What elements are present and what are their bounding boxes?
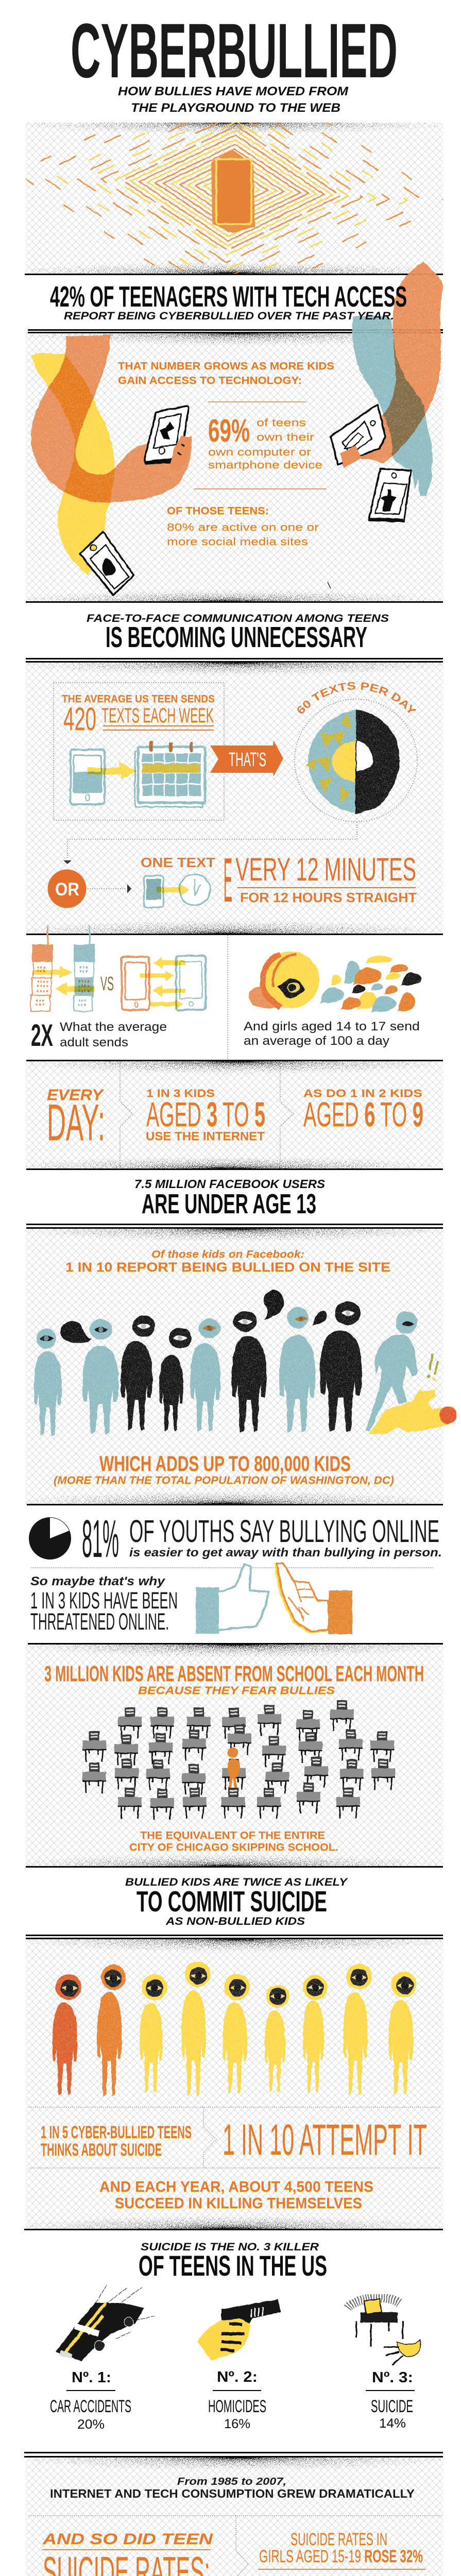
- teen 9: [388, 1972, 417, 2095]
- heading: twice as likely: [125, 1876, 348, 1927]
- person 3: [121, 1315, 155, 1431]
- text: 800,000 kids: WHICH ADDS UP TO 800,000 KIDS: [99, 1451, 351, 1476]
- text: no. 1: Nº. 1:: [72, 2369, 111, 2386]
- rule: [26, 934, 443, 935]
- text: girls rates rose: GIRLS AGED 15-19 ROSE 32%: [259, 2547, 423, 2566]
- text: entire city of chicago: CITY OF CHICAGO SKIPPING SCHOOL.: [129, 1842, 338, 1853]
- text: girls aged 14 to 17: an average of 100 a day: [244, 1034, 389, 1048]
- teen 7: [303, 1975, 328, 2093]
- icon: old cell phones and smartphones: [31, 925, 206, 1011]
- text: 800,000 kids: (MORE THAN THE TOTAL POPULATION OF WASHINGTON, DC): [54, 1475, 394, 1486]
- label: VS: VS: [100, 973, 114, 995]
- subtitle: [118, 84, 349, 115]
- heading: twice as likely: AS NON-BULLIED KIDS: [165, 1916, 305, 1927]
- text: 420 texts each week: 420: [63, 701, 96, 737]
- icon: speeding car: [56, 2284, 155, 2361]
- icon: dotted circle with sun and moon: 60 TEXTS PER DAY: [297, 682, 416, 714]
- section: 81 percent: [29, 1509, 442, 1635]
- text: internet consumption: INTERNET AND TECH CONSUMPTION GREW DRAMATICALLY: [50, 2487, 415, 2500]
- double rule: [24, 2452, 443, 2458]
- text: 3 million kids: BECAUSE THEY FEAR BULLIES: [138, 1685, 335, 1697]
- text: ages 6 to 9: [303, 1089, 423, 1127]
- text: 81 percent of youths: 81%: [82, 1509, 119, 1568]
- text: 2x what the average adult sends: [31, 1018, 167, 1053]
- heading: 42 percent: REPORT BEING CYBERBULLIED OVER THE PAST YEAR.: [64, 310, 394, 322]
- panel: technology access: [26, 333, 443, 601]
- rule: [27, 1504, 443, 1505]
- text: technology access stats: own their: [257, 432, 314, 443]
- double rule: [26, 1935, 443, 1939]
- teen 3: [140, 1974, 167, 2093]
- icon: girl with speech drops: [249, 952, 421, 1012]
- text: technology access stats: smartphone device: [208, 460, 322, 471]
- text: 1 in 3 kids threatened: [30, 1574, 178, 1635]
- icon: middle finger hand: [275, 1563, 352, 1634]
- icon: teal phone sending to calendar: [71, 741, 205, 807]
- left arms: [31, 335, 192, 575]
- teen 6: [265, 1985, 289, 2093]
- icon: thumbs up: [196, 1564, 269, 1634]
- icon: gun in hand: [197, 2299, 281, 2361]
- badge: OR: [47, 860, 131, 908]
- text: entire city of chicago: THE EQUIVALENT OF THE ENTIRE: [140, 1830, 325, 1841]
- table lines and chevron: [29, 2107, 440, 2168]
- text: 1 in 3 kids threatened: 1 IN 3 KIDS HAVE BEEN: [30, 1587, 178, 1614]
- text: 4,500 teens: AND EACH YEAR, ABOUT 4,500 TEENS: [99, 2179, 373, 2195]
- text: and so did teen suicide rates: [42, 2531, 214, 2576]
- heading: face-to-face: [87, 613, 389, 654]
- rule: [25, 274, 443, 275]
- divider: [227, 935, 228, 1059]
- arrow: that's: [210, 740, 283, 776]
- text: 1 in 5 thinks: 1 IN 5 CYBER-BULLIED TEENS: [41, 2123, 192, 2142]
- panel: texting: [26, 663, 443, 934]
- text: technology access stats: of teens: [257, 417, 306, 429]
- text: 2x what the average adult sends: adult sends: [60, 1036, 128, 1049]
- heading: twice as likely: BULLIED KIDS ARE TWICE AS LIKELY: [125, 1876, 348, 1888]
- text: ages 3 to 5: [146, 1088, 265, 1143]
- text: 3 million kids: [44, 1666, 423, 1694]
- panel: hero phone with diamonds: [26, 123, 443, 274]
- heading: no. 3 killer: SUICIDE IS THE NO. 3 KILLER: [141, 2241, 319, 2253]
- text: every day: EVERY: [47, 1087, 105, 1104]
- text: 420 texts each week: THE AVERAGE US TEEN SENDS: [62, 693, 215, 705]
- panel: teen suicide rates: [10, 2445, 453, 2576]
- column: homicides: HOMICIDES: [208, 2397, 266, 2416]
- icon: phone in left hand: [145, 406, 192, 471]
- illustration: rows of empty desks: [82, 1700, 395, 1820]
- column: homicides: [197, 2299, 281, 2431]
- text: technology access stats: OF THOSE TEENS:: [167, 505, 269, 517]
- icon: phone and clock: [144, 874, 210, 907]
- text: bullied on the site: [66, 1250, 390, 1272]
- column: suicide: 14%: [379, 2416, 406, 2431]
- text: technology access stats: 80% are active on one or: [167, 522, 319, 533]
- text: 1 in 3 kids threatened: THREATENED ONLINE.: [30, 1608, 169, 1635]
- text: every day: [47, 1089, 104, 1141]
- text: internet consumption: [50, 2476, 415, 2500]
- icon: phone in teal hand: [369, 469, 411, 521]
- arrow: that's: THAT'S: [229, 749, 266, 771]
- text: girls aged 14 to 17: [244, 1020, 420, 1048]
- column: suicide: SUICIDE: [371, 2397, 413, 2416]
- double rule: [26, 1224, 443, 1229]
- text: ages 3 to 5: USE THE INTERNET: [146, 1129, 265, 1143]
- rule: [26, 1866, 443, 1868]
- text: 81 percent of youths: [82, 1509, 442, 1568]
- text: 81 percent of youths: is easier to get away with than bullying in person.: [129, 1546, 442, 1559]
- text: girls aged 14 to 17: And girls aged 14 to 17 send: [244, 1020, 420, 1033]
- text: 1 in 5 thinks: [41, 2123, 192, 2160]
- double rule: [26, 658, 443, 663]
- illustration: crowd of kids: [34, 1290, 457, 1436]
- panel: every day: [26, 1061, 443, 1168]
- text: internet consumption: From 1985 to 2007,: [177, 2476, 286, 2487]
- title: [71, 7, 398, 115]
- icon: speck: [328, 582, 331, 588]
- icon: lone student: [228, 1748, 240, 1788]
- text: ages 6 to 9: AGED 6 TO 9: [303, 1095, 423, 1134]
- person 8: [320, 1301, 362, 1432]
- illustration: intertwined arms with phones: [31, 261, 443, 595]
- divider and chevron: [29, 2516, 442, 2576]
- heading: no. 3 killer: [139, 2241, 327, 2282]
- double rule: [28, 329, 443, 333]
- text: technology access stats: [118, 361, 334, 548]
- text: girls rates rose: [258, 2530, 425, 2576]
- text: technology access stats: GAIN ACCESS TO TECHNOLOGY:: [118, 375, 302, 386]
- person 2: [82, 1319, 119, 1434]
- person 5: [190, 1318, 220, 1432]
- text: 420 texts each week: [62, 695, 214, 731]
- icon: dotted circle with sun and moon: [295, 682, 417, 822]
- text: one text every 12 minutes: ONE TEXT: [141, 855, 215, 870]
- rule: [24, 2229, 443, 2230]
- text: 1 in 3 kids threatened: So maybe that's why: [30, 1574, 166, 1588]
- icon: phone in right hand: [331, 404, 385, 468]
- text: ages 3 to 5: 1 IN 3 KIDS: [146, 1088, 215, 1099]
- rule: [26, 1168, 443, 1170]
- heading: facebook users: 7.5 MILLION FACEBOOK USERS: [134, 1177, 326, 1191]
- column: car accidents: 20%: [77, 2417, 105, 2432]
- teen 5: [223, 1974, 250, 2094]
- text: no. 2: Nº. 2:: [217, 2369, 258, 2385]
- text: girls rates rose: SUICIDE RATES IN: [291, 2530, 387, 2549]
- heading: no. 3 killer: OF TEENS IN THE US: [139, 2249, 327, 2282]
- text: and so did teen suicide rates: AND SO DID TEEN: [42, 2531, 214, 2548]
- heading: facebook users: [134, 1177, 326, 1219]
- text: entire city of chicago: [130, 1832, 338, 1851]
- heading: twice as likely: TO COMMIT SUICIDE: [136, 1885, 327, 1918]
- icon: phone: [211, 149, 255, 233]
- text: technology access stats: more social media sites: [167, 536, 308, 548]
- text: every day: DAY:: [47, 1094, 105, 1151]
- text: one text every 12 minutes: FOR 12 HOURS STRAIGHT: [240, 890, 417, 905]
- chevron dividers: [120, 1061, 294, 1168]
- speech bubble: [264, 1290, 284, 1320]
- person 4: [159, 1328, 192, 1431]
- exclamation marks: [426, 1353, 439, 1381]
- text: bullied on the site: 1 IN 10 REPORT BEING BULLIED ON THE SITE: [65, 1260, 390, 1275]
- text: 2x what the average adult sends: What the average: [60, 1020, 167, 1034]
- chart: pie 81 percent: [29, 1517, 71, 1559]
- subtitle: HOW BULLIES HAVE MOVED FROM: [118, 84, 349, 98]
- heading: face-to-face: FACE-TO-FACE COMMUNICATION AMONG TEENS: [87, 613, 389, 624]
- text: 420 texts each week: TEXTS EACH WEEK: [101, 704, 214, 727]
- text: no. 3: Nº. 3:: [372, 2369, 413, 2386]
- rule: [26, 1060, 443, 1061]
- badge: OR: OR: [55, 879, 79, 900]
- text: one text every 12 minutes: E: [224, 845, 232, 915]
- right arms: [340, 261, 443, 496]
- text: ages 3 to 5: AGED 3 TO 5: [146, 1095, 265, 1134]
- text: 800,000 kids: [54, 1456, 394, 1487]
- speech bubble: [312, 1311, 327, 1326]
- text: 2x what the average adult sends: 2X: [31, 1018, 53, 1053]
- icon: overturned chair and desk: [348, 2298, 420, 2365]
- speech bubble: [61, 1321, 92, 1343]
- panel: facebook bullying: [26, 1229, 443, 1504]
- teen 4: [181, 1961, 211, 2096]
- panel: suicide statistics: [26, 1939, 443, 2229]
- teen 2: [97, 1964, 126, 2096]
- heading: facebook users: ARE UNDER AGE 13: [142, 1189, 316, 1219]
- text: technology access stats: THAT NUMBER GROWS AS MORE KIDS: [118, 361, 334, 372]
- subtitle: THE PLAYGROUND TO THE WEB: [131, 101, 340, 115]
- column: suicide: [348, 2298, 420, 2431]
- text: bullied on the site: Of those kids on Facebook:: [151, 1249, 304, 1260]
- illustration: nine teens: [52, 1961, 417, 2096]
- text: 1 in 5 thinks: THINKS ABOUT SUICIDE: [41, 2140, 162, 2160]
- text: technology access stats: 69%: [208, 413, 250, 449]
- dashed box and connectors: [54, 683, 357, 889]
- column: car accidents: CAR ACCIDENTS: [50, 2397, 131, 2416]
- text: ages 6 to 9: AS DO 1 IN 2 KIDS: [303, 1088, 422, 1099]
- text: technology access stats: own computer or: [208, 447, 311, 458]
- person 7: [279, 1307, 316, 1433]
- person 9 kicking: [366, 1311, 417, 1431]
- fallen victim: [369, 1389, 457, 1434]
- person 6: [232, 1311, 267, 1433]
- teen 8: [343, 1964, 372, 2095]
- text: one text every 12 minutes: [141, 857, 417, 903]
- text: 4,500 teens: SUCCEED IN KILLING THEMSELVES: [115, 2195, 362, 2212]
- column: car accidents: [50, 2284, 155, 2432]
- person 1: [34, 1328, 62, 1436]
- icon: concentric diamonds and phone: [26, 123, 443, 274]
- panel: absent from school: [26, 1645, 443, 1866]
- rule: [26, 601, 443, 603]
- icon: phone at end of yellow arm: [80, 532, 134, 595]
- teen 1: [52, 1974, 81, 2095]
- text: 4,500 teens: [99, 2179, 373, 2212]
- rule: [28, 1643, 443, 1645]
- column: homicides: 16%: [224, 2417, 250, 2431]
